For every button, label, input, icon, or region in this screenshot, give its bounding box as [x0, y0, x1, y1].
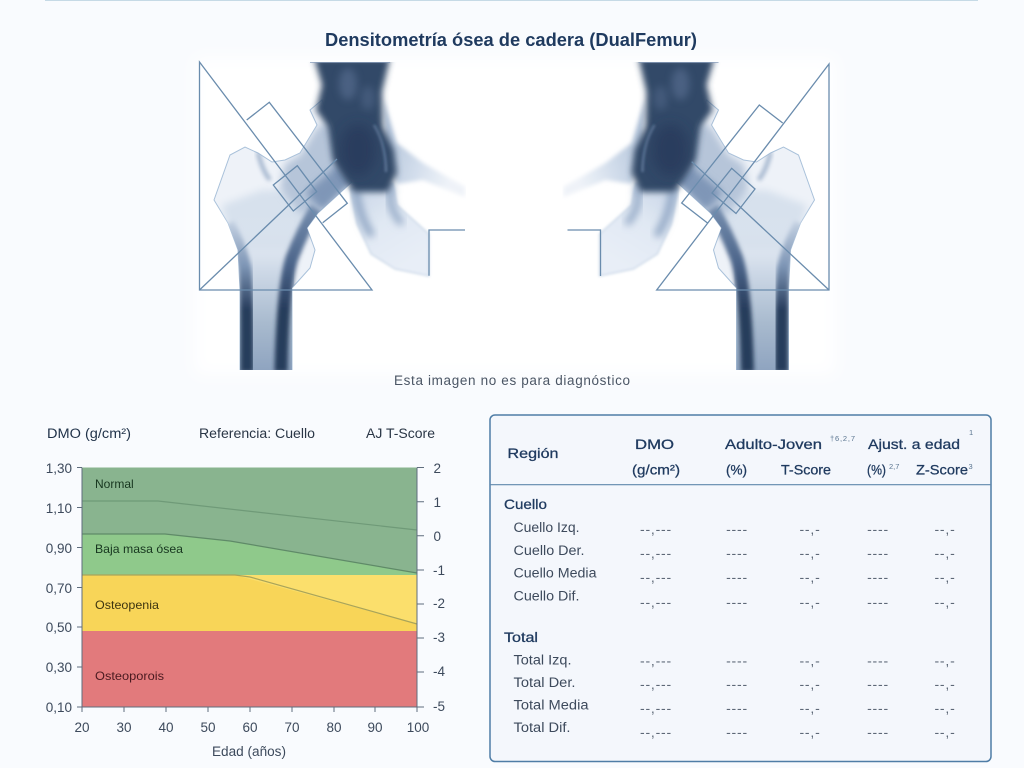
section: Cuello: --,- — [934, 521, 956, 537]
section: Cuello: ---- — [726, 594, 748, 610]
x axis labels: 70 — [284, 720, 300, 735]
section: Total: ---- — [867, 700, 889, 716]
table header: †6,2,7 — [830, 434, 855, 443]
table header: DMO — [635, 436, 674, 452]
x axis labels — [74, 720, 429, 759]
x axis labels: 60 — [242, 720, 258, 735]
chart headers — [47, 426, 435, 441]
section: Total: ---- — [867, 676, 889, 692]
right hip analysis overlay — [568, 64, 829, 290]
right axis labels: 1 — [433, 495, 441, 510]
section: Total: Total Dif. — [514, 720, 570, 735]
section: Total: --,--- — [640, 652, 672, 668]
chart bands — [82, 468, 417, 708]
x axis labels: Edad (años) — [212, 744, 286, 759]
band labels: Osteoporois — [95, 669, 164, 683]
section: Total: Total — [504, 629, 538, 645]
table header: T-Score — [781, 462, 831, 478]
x axis labels: 50 — [200, 720, 216, 735]
section: Total: ---- — [726, 700, 748, 716]
chart headers: AJ T-Score — [366, 426, 435, 441]
right hip x-ray — [564, 58, 814, 372]
section: Total: --,- — [934, 676, 956, 692]
section: Total: Total Izq. — [514, 652, 572, 668]
section: Total: ---- — [726, 676, 748, 692]
image caption: Esta imagen no es para diagnóstico — [394, 373, 630, 388]
section: Cuello: ---- — [726, 521, 748, 537]
section: Total: --,--- — [640, 700, 672, 716]
right axis labels: -5 — [433, 699, 445, 714]
right axis labels: 0 — [433, 529, 441, 544]
section: Cuello: --,--- — [640, 569, 672, 585]
section: Cuello: --,- — [934, 594, 956, 610]
left axis labels: 0,70 — [46, 581, 72, 596]
left hip analysis overlay — [200, 62, 465, 290]
chart axes — [77, 468, 424, 712]
right axis labels: -3 — [433, 630, 445, 645]
left axis labels: 1,30 — [46, 461, 72, 476]
section: Total: ---- — [867, 724, 889, 740]
section: Total: --,- — [799, 724, 821, 740]
table header: Región — [508, 445, 558, 461]
right axis labels — [433, 461, 445, 714]
right axis labels: -1 — [433, 563, 445, 578]
title: Densitometría ósea de cadera (DualFemur) — [325, 30, 697, 50]
section: Cuello: --,- — [934, 545, 956, 561]
left axis labels: 0,30 — [46, 660, 72, 675]
section: Cuello: ---- — [726, 545, 748, 561]
table header — [508, 428, 973, 478]
table header: (g/cm²) — [632, 462, 680, 478]
hip scan: right hip — [564, 58, 829, 372]
section: Cuello: --,- — [799, 569, 821, 585]
right axis labels: 2 — [433, 461, 441, 476]
section: Total: Total Media — [514, 698, 589, 712]
table header: 2,7 — [889, 462, 899, 471]
band labels: Baja masa ósea — [95, 542, 183, 556]
band labels: Osteopenia — [95, 598, 159, 612]
section: Cuello: ---- — [867, 545, 889, 561]
table header: Z-Score — [916, 462, 968, 478]
x axis labels: 90 — [367, 720, 383, 735]
chart headers: Referencia: Cuello — [199, 426, 315, 441]
table header: (%) — [726, 462, 747, 478]
section: Cuello: --,- — [799, 594, 821, 610]
left axis labels: 0,10 — [46, 700, 72, 715]
section: Cuello: Cuello Dif. — [514, 588, 580, 604]
section: Cuello: --,--- — [640, 521, 672, 537]
section: Total: --,--- — [640, 676, 672, 692]
chart: bone density by age — [46, 426, 445, 759]
section: Total: ---- — [867, 652, 889, 668]
section: Total: --,- — [934, 652, 956, 668]
table header: Ajust. a edad — [868, 436, 960, 452]
x axis labels: 80 — [326, 720, 342, 735]
section: Total: --,- — [799, 676, 821, 692]
table header: Adulto-Joven — [725, 436, 822, 452]
table header: 1 — [969, 428, 973, 437]
section: Total: ---- — [726, 724, 748, 740]
section: Cuello: ---- — [867, 569, 889, 585]
section: Total: --,- — [934, 724, 956, 740]
section: Cuello: ---- — [867, 594, 889, 610]
right axis labels: -4 — [433, 664, 445, 679]
left axis labels: 1,10 — [46, 501, 72, 516]
x axis labels: 40 — [158, 720, 174, 735]
section: Total — [504, 629, 956, 740]
left axis labels: 0,50 — [46, 620, 72, 635]
section: Cuello: ---- — [867, 521, 889, 537]
chart headers: DMO (g/cm²) — [47, 426, 131, 441]
right axis labels: -2 — [433, 596, 445, 611]
section: Total: ---- — [726, 652, 748, 668]
results table panel — [490, 415, 991, 762]
table frame — [490, 415, 991, 762]
section: Cuello: --,- — [799, 521, 821, 537]
left hip x-ray — [214, 58, 465, 372]
section: Total: --,- — [799, 700, 821, 716]
section: Cuello: --,--- — [640, 545, 672, 561]
band labels: Normal — [95, 477, 134, 491]
x axis labels: 100 — [407, 720, 429, 735]
section: Total: Total Der. — [514, 675, 576, 690]
table header: (%) — [867, 462, 886, 478]
section: Total: --,- — [799, 652, 821, 668]
section: Cuello: --,--- — [640, 594, 672, 610]
section: Cuello: Cuello Izq. — [514, 520, 580, 535]
table header: 3 — [968, 462, 973, 471]
section: Cuello: Cuello Media — [514, 566, 597, 580]
section: Total: --,--- — [640, 724, 672, 740]
section: Total: --,- — [934, 700, 956, 716]
hip scan: left hip — [200, 58, 465, 372]
x axis labels: 20 — [74, 720, 90, 735]
section: Cuello: --,- — [799, 545, 821, 561]
section: Cuello: Cuello Der. — [514, 543, 584, 558]
left axis labels — [46, 461, 72, 715]
reference curves — [82, 501, 417, 624]
section: Cuello: --,- — [934, 569, 956, 585]
band labels — [95, 477, 183, 683]
x axis labels: 30 — [116, 720, 132, 735]
left axis labels: 0,90 — [46, 541, 72, 556]
section: Cuello: Cuello — [504, 496, 547, 512]
section: Cuello — [504, 496, 956, 610]
section: Cuello: ---- — [726, 569, 748, 585]
